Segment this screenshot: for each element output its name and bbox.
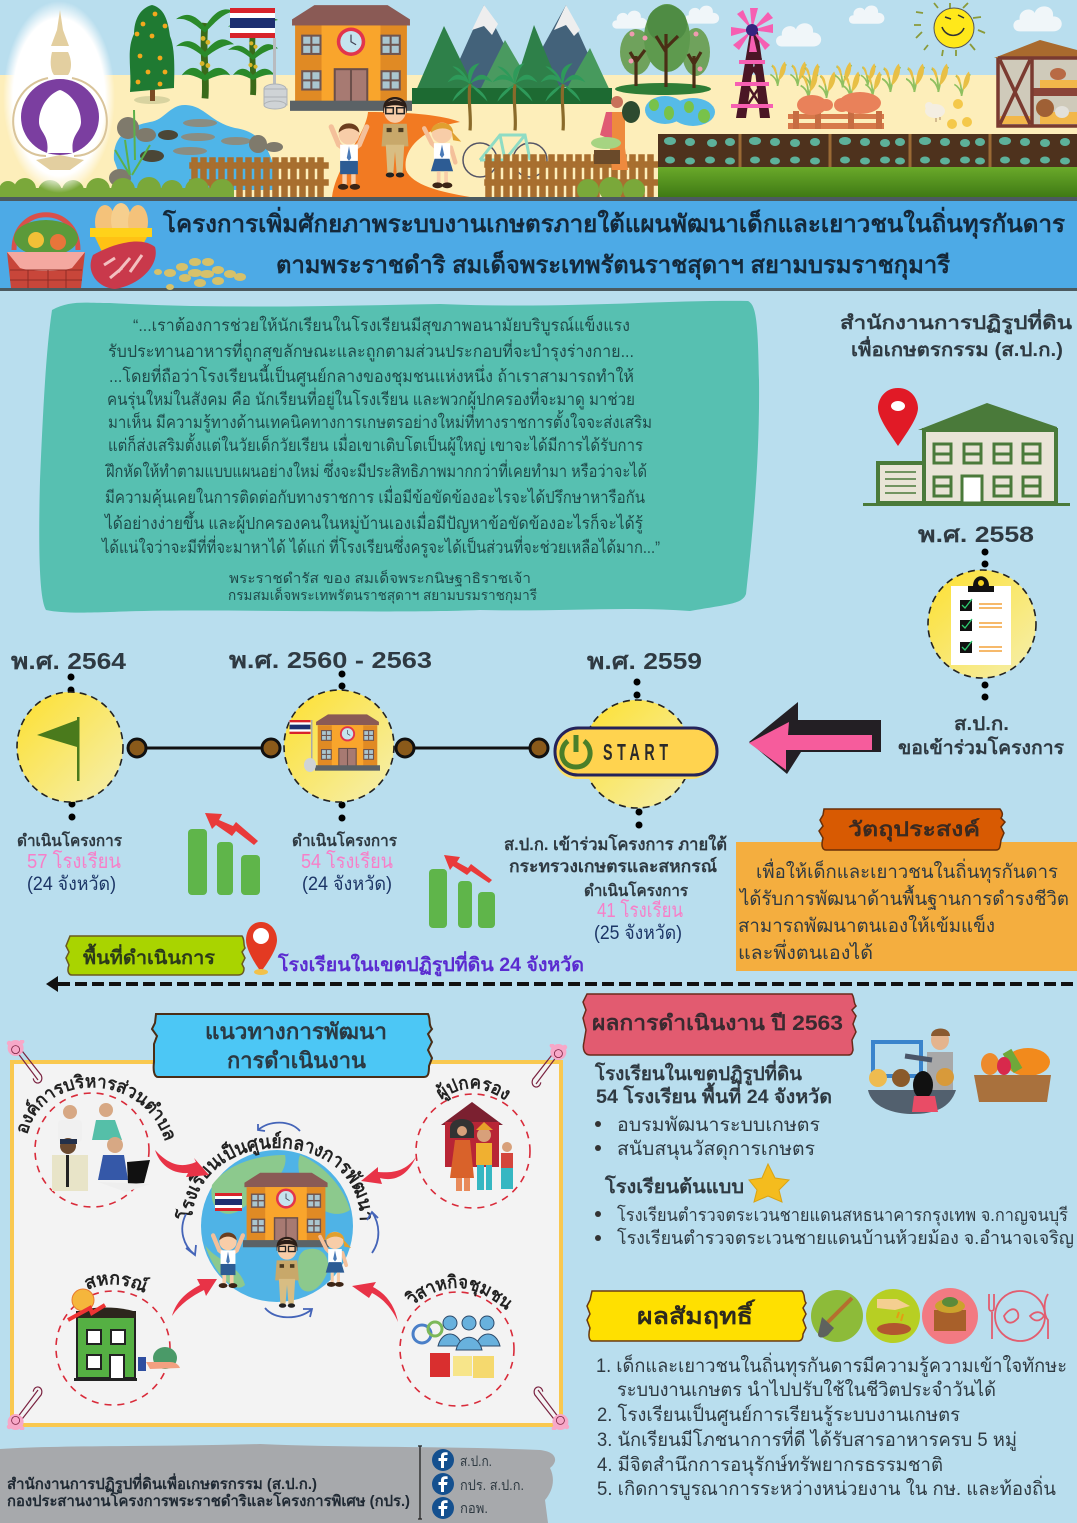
center: school as development hub: [174, 1131, 371, 1308]
icon: meat: [91, 242, 156, 289]
title: โครงการเพิ่มศักยภาพระบบงานเกษตรภายใต้แผนพัฒนาเด็กและเยาวชนในถิ่นทุรกันดาร: [162, 206, 1065, 240]
circle: community enterprise: [399, 1273, 515, 1407]
panel: royal quotation: คนรุ่นใหม่ในสังคม คือ นักเรียนที่อยู่ในโรงเรียน และพวกผู้ปกครองที่จะมาดู มาช่วย: [107, 387, 635, 410]
circle: subdistrict administration: [18, 1074, 174, 1208]
milestone text: 54 schools: (24 จังหวัด): [302, 874, 392, 895]
operating area tag: [66, 936, 245, 975]
panel: royal quotation: มาเห็น มีความรู้ทางด้านเทคนิคทางการเกษตรอย่างใหม่ที่ทางราชการตั้งใจจะส่งเสริม: [108, 410, 652, 433]
bar chart: decline to 57: [188, 813, 260, 895]
rice field: [658, 167, 1077, 197]
objectives panel: ได้รับการพัฒนาด้านพื้นฐานการดำรงชีวิต: [738, 885, 1069, 910]
panel: royal quotation: แต่ก็ส่งเสริมตั้งแต่ในวัยเด็กวัยเรียน เมื่อเขาเติบโตเป็นผู้ใหญ่ เขาจะได้มีการได้รับการ: [108, 433, 643, 456]
icon: eggs in bowl: [90, 203, 152, 254]
bullet list: activities: สนับสนุนวัสดุการเกษตร: [617, 1139, 815, 1161]
panel: development guidelines: [6, 1013, 570, 1430]
bullet list: activities: อบรมพัฒนาระบบเกษตร: [617, 1115, 820, 1136]
operating area tag: พื้นที่ดำเนินการ: [83, 943, 216, 969]
header illustration: [0, 0, 1077, 204]
numbered list: outcomes: ระบบงานเกษตร นำไปปรับใช้ในชีวิตประจำวันได้: [617, 1379, 996, 1401]
footer: [0, 1444, 555, 1523]
circle: cooperative: สหกรณ์: [84, 1274, 151, 1293]
agency heading: สำนักงานการปฏิรูปที่ดิน: [840, 309, 1072, 335]
icon: farmer with vegetables: [591, 96, 640, 170]
milestone text: 57 schools: [17, 830, 122, 895]
panel: royal quotation: ได้แน่ใจว่าจะมีที่ที่จะมาหาได้ ได้แก่ ที่โรงเรียนซึ่งครูจะได้เป็นส่วนที่จะช่วยเหลือได้มาก...”: [100, 535, 660, 558]
milestone text: 41 schools: ดำเนินโครงการ: [584, 880, 688, 900]
icon: star: [749, 1164, 789, 1202]
panel: results 2563: 54 โรงเรียน พื้นที่ 24 จังหวัด: [596, 1082, 832, 1108]
milestone text: 41 schools: ส.ป.ก. เข้าร่วมโครงการ ภายใต้: [504, 834, 727, 854]
footer: กองประสานงานโครงการพระราชดำริและโครงการพิเศษ (กปร.): [7, 1491, 410, 1510]
heading: model schools: โรงเรียนต้นแบบ: [604, 1175, 744, 1198]
icon: fruit tree: [130, 5, 174, 104]
icon: school building: [290, 5, 412, 111]
circle: parents: ผู้ปกครอง: [436, 1078, 510, 1102]
timeline node: 2564: พ.ศ. 2564: [11, 648, 126, 674]
milestone text: 41 schools: 41 โรงเรียน: [597, 899, 683, 922]
panel: royal quotation: รับประทานอาหารที่ถูกสุขลักษณะและถูกตามส่วนประกอบที่จะบำรุงร่างกาย...: [108, 339, 634, 362]
timeline connectors: [128, 739, 548, 757]
operating area: โรงเรียนในเขตปฏิรูปที่ดิน 24 จังหวัด: [277, 951, 584, 977]
milestone text: 57 schools: 57 โรงเรียน: [27, 850, 121, 873]
arrows: into the school: [155, 1150, 416, 1322]
circle: subdistrict administration: องค์การบริหารส่วนตำบล: [18, 1074, 174, 1141]
arrow: dashed timeline arrow: [46, 976, 1077, 992]
timeline node: application: [928, 548, 1036, 700]
panel: outcomes: [587, 1288, 1067, 1500]
icon: pigs with fence: [788, 92, 884, 129]
timeline node: 2559 start: พ.ศ. 2559: [587, 648, 702, 674]
social links: กอพ.: [460, 1500, 488, 1516]
panel: royal quotation: กรมสมเด็จพระเทพรัตนราชสุดาฯ สยามบรมราชกุมารี: [228, 586, 537, 604]
objectives panel: และพึ่งตนเองได้: [738, 939, 873, 964]
icon: vegetable beds: [658, 134, 1077, 174]
panel: royal quotation: “...เราต้องการช่วยให้นักเรียนในโรงเรียนมีสุขภาพอนามัยบริบูรณ์แข็งแรง: [133, 314, 630, 336]
timeline node: 2559 start: [554, 648, 717, 828]
milestone text: 54 schools: ดำเนินโครงการ: [292, 830, 397, 850]
label: apply to join: [898, 714, 1065, 759]
label: apply to join: ส.ป.ก.: [954, 714, 1009, 735]
center: school as development hub: โรงเรียนเป็นศูนย์กลางการพัฒนา: [174, 1131, 371, 1220]
objectives panel: [736, 809, 1077, 971]
outcomes tag: ผลสัมฤทธิ์: [637, 1299, 756, 1329]
icon: orchard trees: [615, 4, 711, 95]
timeline node: 2560-2563: [229, 647, 432, 822]
icon: food basket: [7, 215, 85, 288]
icon: agency building with pin: [863, 388, 1070, 506]
logo: [3, 1, 115, 193]
year 2558: พ.ศ. 2558: [918, 522, 1034, 547]
objectives panel: เพื่อให้เด็กและเยาวชนในถิ่นทุรกันดาร: [756, 858, 1058, 884]
clouds: [612, 6, 1062, 46]
milestone text: 41 schools: [504, 834, 727, 944]
timeline node: 2564: [11, 648, 126, 820]
milestone text: 57 schools: (24 จังหวัด): [27, 874, 116, 895]
start button: START: [603, 741, 668, 766]
panel: royal quotation: ได้อย่างง่ายขึ้น และผู้ปกครองคนในหมู่บ้านเองเมื่อมีปัญหาข้อขัดข้องอะไรก็จะได้รู้: [103, 511, 643, 534]
icon: treasure crate: [922, 1288, 978, 1344]
timeline: [11, 647, 727, 944]
panel: royal quotation: ฝึกหัดให้ทำตามแบบแผนอย่างใหม่ ซึ่งจะมีประสิทธิภาพมากกว่าที่เคยทำมา หรือว่าจะได้: [104, 459, 647, 481]
numbered list: outcomes: [596, 1352, 1067, 1500]
panel: royal quotation: พระราชดำรัส ของ สมเด็จพระกนิษฐาธิราชเจ้า: [229, 569, 531, 587]
social links: ส.ป.ก.: [460, 1453, 492, 1469]
start button: [554, 728, 717, 779]
timeline node: 2560-2563: พ.ศ. 2560 - 2563: [229, 647, 432, 673]
arrows: blue cycle: [182, 1123, 378, 1317]
milestone text: 57 schools: ดำเนินโครงการ: [17, 830, 122, 850]
path and characters: [331, 97, 470, 197]
milestone text: 54 schools: [292, 830, 397, 895]
icon: classroom: [868, 1028, 956, 1114]
icon: location pin: [246, 922, 277, 975]
numbered list: outcomes: 3. นักเรียนมีโภชนาการที่ดี ได้รับสารอาหารครบ 5 หมู่: [597, 1426, 1017, 1451]
results tag: ผลการดำเนินงาน ปี 2563: [592, 1011, 843, 1035]
panel: results 2563: [583, 994, 1074, 1248]
panel: royal quotation: มีความคุ้นเคยในการติดต่อกับทางราชการ เมื่อมีข้อขัดข้องอะไรจะได้ปรึกษาหารือกัน: [105, 485, 645, 508]
agency heading: เพื่อเกษตรกรรม (ส.ป.ก.): [851, 336, 1063, 361]
label: apply to join: ขอเข้าร่วมโครงการ: [898, 736, 1065, 759]
icon: bicycle: [463, 135, 547, 177]
icon: frog pond: [645, 96, 715, 126]
milestone text: 41 schools: กระทรวงเกษตรและสหกรณ์: [509, 856, 717, 876]
icon: sun: [914, 3, 985, 56]
guidelines tag: การดำเนินงาน: [227, 1048, 366, 1073]
icon: pond with fish: [109, 105, 283, 190]
guidelines tag: แนวทางการพัฒนา: [205, 1019, 387, 1044]
milestone text: 41 schools: (25 จังหวัด): [594, 923, 682, 944]
outcomes tag: [587, 1291, 806, 1341]
icon: plate and cutlery: [989, 1291, 1048, 1341]
numbered list: outcomes: 5. เกิดการบูรณาการระหว่างหน่วยงาน ใน กษ. และท้องถิ่น: [597, 1475, 1056, 1500]
social links: กปร. ส.ป.ก.: [460, 1477, 524, 1493]
objectives tag: วัตถุประสงค์: [848, 818, 980, 842]
bar chart: decline to 54: [429, 855, 495, 928]
title band: [0, 197, 1077, 291]
agency heading: [840, 309, 1072, 361]
bushes: [0, 177, 645, 204]
circle: parents: [415, 1078, 531, 1209]
icon: corn plants: [770, 61, 970, 98]
objectives tag: [819, 809, 1005, 850]
numbered list: outcomes: 1. เด็กและเยาวชนในถิ่นทุรกันดารมีความรู้ความเข้าใจทักษะ: [596, 1352, 1067, 1378]
social links: [432, 1449, 524, 1519]
icon: shovel: [811, 1290, 863, 1342]
milestone text: 54 schools: 54 โรงเรียน: [301, 850, 393, 873]
icon: chickens: [925, 99, 972, 129]
icon: vegetable crate: [974, 1048, 1051, 1102]
numbered list: outcomes: 4. มีจิตสำนึกการอนุรักษ์ทรัพยากรธรรมชาติ: [597, 1454, 943, 1477]
arrow: pink left arrow: [749, 702, 881, 774]
guidelines tag: [152, 1014, 432, 1077]
operating area: [66, 922, 584, 977]
icon: chicken coop: [994, 40, 1077, 126]
icon: mountains: [412, 5, 612, 130]
title: [162, 206, 1065, 281]
fences: [190, 155, 660, 197]
icon: windmill: [731, 8, 773, 118]
objectives panel: สามารถพัฒนาตนเองให้เข้มแข็ง: [738, 913, 995, 937]
bullet list: activities: [595, 1115, 820, 1161]
icon: seeds: [154, 258, 246, 290]
icons: corner safety pins: [7, 1039, 569, 1431]
panel: royal quotation: [39, 301, 759, 613]
circle: community enterprise: วิสาหกิจชุมชน: [404, 1273, 512, 1310]
footer: สำนักงานการปฏิรูปที่ดินเพื่อเกษตรกรรม (ส.ป.ก.): [7, 1473, 317, 1494]
icon: planting seeds: [866, 1289, 920, 1343]
bullet list: model schools: โรงเรียนตำรวจตระเวนชายแดนบ้านห้วยม้อง จ.อำนาจเจริญ: [617, 1227, 1074, 1248]
bullet list: model schools: [595, 1204, 1074, 1248]
circle: cooperative: [55, 1274, 180, 1406]
panel: results 2563: โรงเรียนในเขตปฏิรูปที่ดิน: [594, 1060, 802, 1086]
panel: royal quotation: ...โดยที่ถือว่าโรงเรียนนี้เป็นศูนย์กลางของชุมชนแห่งหนึ่ง ถ้าเราสามารถทำให้: [109, 364, 634, 387]
results tag: [583, 994, 856, 1055]
icon: banana trees and flag: [176, 8, 287, 109]
title: ตามพระราชดำริ สมเด็จพระเทพรัตนราชสุดาฯ สยามบรมราชกุมารี: [276, 250, 950, 281]
numbered list: outcomes: 2. โรงเรียนเป็นศูนย์การเรียนรู้ระบบงานเกษตร: [597, 1402, 960, 1426]
